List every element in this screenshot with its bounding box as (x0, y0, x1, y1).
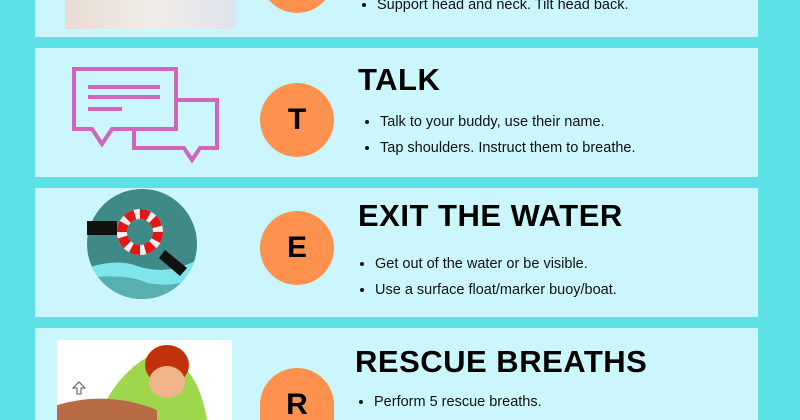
bullets: exit: Get out of the water or be visible. (375, 256, 588, 272)
bullets: exit: Use a surface float/marker buoy/boat. (375, 282, 617, 298)
circle: E: E (287, 231, 307, 264)
image: baby photo (65, 0, 236, 29)
panel: rescue breaths (35, 328, 758, 420)
icon: lifebuoy rescue (87, 189, 197, 299)
bullets: talk: Talk to your buddy, use their name. (380, 114, 605, 130)
circle: letter (cut) (260, 0, 334, 13)
circle: R (260, 368, 334, 420)
panel: talk (35, 48, 758, 177)
heading: TALK: TALK (358, 62, 440, 97)
panel: exit the water (35, 188, 758, 317)
bullets: talk (365, 114, 636, 156)
circle: T: T (288, 103, 306, 136)
heading: EXIT THE WATER: EXIT THE WATER (358, 198, 623, 233)
bullets: rescue: Perform 5 rescue breaths. (374, 394, 542, 410)
image: rescue breaths illustration (57, 340, 232, 420)
panel: airway (top, cut) (35, 0, 758, 37)
bullets: talk: Tap shoulders. Instruct them to breathe. (380, 140, 636, 156)
icon: speech bubbles (72, 67, 219, 164)
heading: RESCUE BREATHS: RESCUE BREATHS (355, 344, 647, 379)
circle: T (260, 83, 334, 157)
circle: E (260, 211, 334, 285)
bullets: exit (360, 256, 617, 298)
